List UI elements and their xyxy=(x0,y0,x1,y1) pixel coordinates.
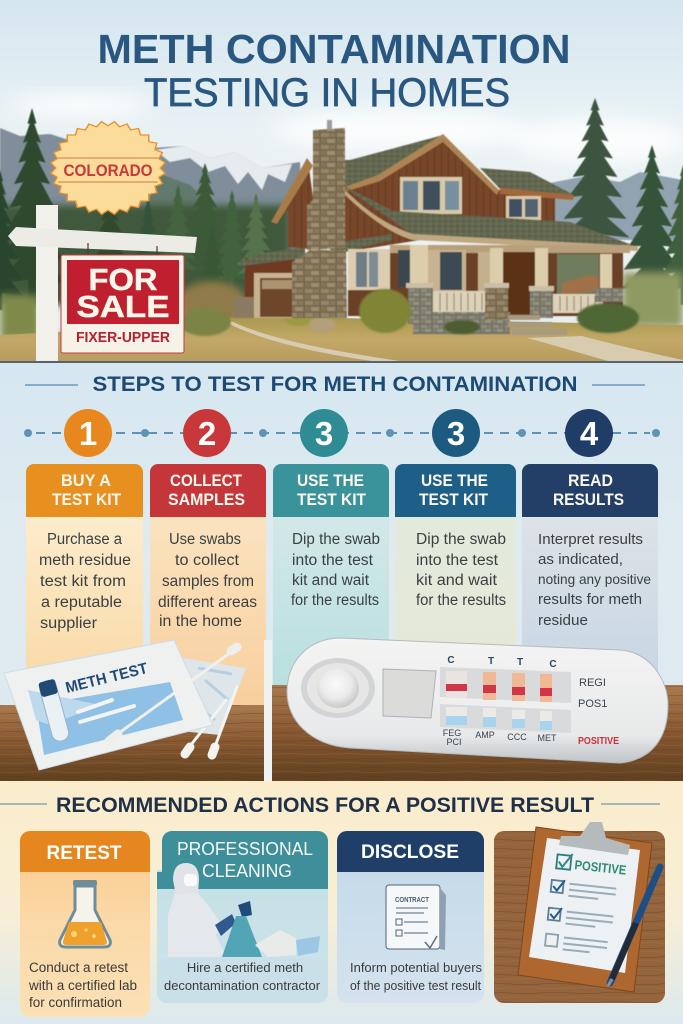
cassette labels: C xyxy=(549,659,557,670)
card: collect samples: samples from xyxy=(162,573,254,590)
card: buy a test kit: meth residue xyxy=(39,552,131,569)
right pines xyxy=(560,98,683,305)
card: use the test kit: TEST KIT xyxy=(297,491,366,509)
sign post xyxy=(36,205,58,362)
packet front xyxy=(4,640,213,770)
porch wall xyxy=(348,250,623,316)
garage xyxy=(233,247,305,318)
sky xyxy=(0,0,683,362)
dirt path xyxy=(229,321,683,362)
steps heading: STEPS TO TEST FOR METH CONTAMINATION xyxy=(92,373,578,396)
photo: test cassette: POS1 xyxy=(578,698,607,710)
card: collect samples: COLLECT xyxy=(170,472,242,490)
door xyxy=(503,252,535,314)
right wing wall xyxy=(480,190,555,226)
upper roof xyxy=(337,135,443,188)
timeline xyxy=(24,409,660,457)
mountains xyxy=(0,128,683,260)
card: read results: Interpret results xyxy=(538,531,643,548)
photo: test cassette: PCI xyxy=(446,737,462,747)
card: buy a test kit: test kit from xyxy=(40,573,126,590)
steps xyxy=(508,315,567,335)
photo: test packet xyxy=(0,640,272,781)
left forest xyxy=(0,108,290,310)
left gable xyxy=(271,158,320,250)
card: use the test kit xyxy=(273,464,389,687)
icon: flask xyxy=(60,880,110,947)
photo: test cassette: AMP xyxy=(475,730,495,740)
card: buy a test kit: supplier xyxy=(40,615,97,632)
card: use the test kit: USE THE xyxy=(297,472,364,490)
porch windows xyxy=(398,250,490,292)
sign board: FIXER-UPPER xyxy=(76,329,170,346)
card: professional cleaning xyxy=(157,831,328,1003)
house xyxy=(233,120,638,335)
cassette well xyxy=(301,658,375,718)
packet behind xyxy=(170,658,246,735)
card: disclose: Inform potential buyers xyxy=(350,960,482,975)
title xyxy=(98,26,570,115)
photo: test cassette: REGI xyxy=(579,677,606,689)
test strips xyxy=(440,667,571,733)
sign board: SALE xyxy=(76,289,170,324)
card: collect samples: Use swabs xyxy=(169,531,241,548)
card: collect samples xyxy=(150,464,266,707)
actions heading: RECOMMENDED ACTIONS FOR A POSITIVE RESULT xyxy=(56,794,594,817)
card: disclose: DISCLOSE xyxy=(361,842,459,863)
step number 2 xyxy=(183,409,231,457)
card: use the test kit second: USE THE xyxy=(421,472,488,490)
porch beam xyxy=(390,245,630,253)
sale sign xyxy=(8,205,197,362)
icon: contract: CONTRACT xyxy=(395,897,430,904)
card: use the test kit second xyxy=(395,464,516,687)
sign arm xyxy=(8,227,197,253)
card: buy a test kit: TEST KIT xyxy=(52,491,121,509)
stone foundation xyxy=(406,283,623,334)
card: use the test kit: into the test xyxy=(292,552,374,569)
card: retest: Conduct a retest xyxy=(29,960,128,975)
right roof xyxy=(480,168,574,195)
photo: test cassette: CCC xyxy=(507,732,527,742)
card: professional cleaning: Hire a certified meth xyxy=(187,960,303,975)
photo: test cassette: MET xyxy=(538,733,557,743)
card: retest: with a certified lab xyxy=(28,978,137,993)
card: retest: RETEST xyxy=(47,843,122,864)
view through porch xyxy=(557,254,599,296)
swab on top xyxy=(112,650,234,738)
cassette labels: C xyxy=(447,655,455,666)
clipboard paper xyxy=(529,838,640,973)
right window xyxy=(506,196,541,220)
card: read results xyxy=(522,464,658,687)
card: read results: RESULTS xyxy=(553,491,624,509)
vial xyxy=(38,679,70,743)
card: read results: residue xyxy=(538,612,588,629)
lower wall xyxy=(345,190,412,250)
recommended actions panel xyxy=(0,781,683,1024)
card: buy a test kit xyxy=(26,464,143,707)
card: buy a test kit: BUY A xyxy=(61,472,111,490)
checklist: POSITIVE xyxy=(574,857,627,878)
card: disclose xyxy=(337,831,484,1003)
sign board xyxy=(61,255,184,353)
icon: cleaner in protective suit xyxy=(168,863,320,957)
card: read results: results for meth xyxy=(538,591,642,608)
card: disclose: of the positive test result xyxy=(350,978,481,993)
card: collect samples: to collect xyxy=(175,552,240,569)
colorado badge: COLORADO xyxy=(64,161,152,180)
gable trim xyxy=(345,134,499,195)
step number 3: 3 xyxy=(315,415,333,452)
title: METH CONTAMINATION xyxy=(98,26,570,72)
card: read results: as indicated, xyxy=(538,551,623,568)
brush xyxy=(0,272,683,359)
step number 4 xyxy=(565,409,613,457)
step number 3 second: 3 xyxy=(447,415,465,452)
step number 4: 4 xyxy=(580,415,599,452)
cassette labels: T xyxy=(488,656,494,667)
bushes xyxy=(359,289,639,334)
card: buy a test kit: Purchase a xyxy=(47,531,122,548)
step number 3 xyxy=(300,409,348,457)
photo: test cassette xyxy=(272,638,683,781)
chimney xyxy=(292,120,347,318)
checklist xyxy=(545,852,628,955)
card: use the test kit: for the results xyxy=(291,592,379,609)
packet label: METH TEST xyxy=(64,660,150,697)
card: use the test kit second: into the test xyxy=(416,552,499,569)
fascia xyxy=(336,182,638,251)
swabs xyxy=(185,687,237,755)
card: retest: for confirmation xyxy=(29,995,122,1010)
icon: contract xyxy=(386,885,446,950)
card: use the test kit second: Dip the swab xyxy=(416,531,506,548)
step number 2: 2 xyxy=(198,415,216,452)
colorado badge xyxy=(52,122,164,214)
card: retest xyxy=(20,831,150,1017)
card: use the test kit: kit and wait xyxy=(292,572,370,589)
sign board: FOR xyxy=(88,262,158,297)
hero scene xyxy=(0,0,683,362)
lower left window xyxy=(348,249,390,290)
card: collect samples: different areas xyxy=(158,594,257,611)
card: professional cleaning: CLEANING xyxy=(202,861,292,881)
step number 1: 1 xyxy=(79,415,97,452)
porch columns xyxy=(410,245,612,288)
title: TESTING IN HOMES xyxy=(144,71,510,115)
photo: test cassette: POSITIVE xyxy=(578,736,619,747)
card: use the test kit: Dip the swab xyxy=(292,531,380,548)
clipboard board xyxy=(518,827,652,992)
main lower roof xyxy=(337,182,638,247)
cassette labels: T xyxy=(517,657,523,668)
card: professional cleaning: decontamination contractor xyxy=(164,978,321,993)
railings xyxy=(433,291,603,313)
card: read results: READ xyxy=(568,472,613,490)
card: collect samples: in the home xyxy=(159,613,242,630)
sample window xyxy=(383,669,436,718)
cassette body xyxy=(287,638,668,763)
photo: test cassette: FEG xyxy=(443,728,461,738)
steps panel xyxy=(0,361,683,781)
porch roof xyxy=(330,234,392,254)
card: read results: noting any positive xyxy=(538,571,651,587)
clouds xyxy=(10,93,683,162)
step number 3 second xyxy=(432,409,480,457)
shrub xyxy=(179,304,335,336)
step number 1 xyxy=(64,409,112,457)
ground xyxy=(0,316,683,362)
card: buy a test kit: a reputable xyxy=(41,594,122,611)
card: professional cleaning: PROFESSIONAL xyxy=(177,839,313,859)
actions background xyxy=(0,781,683,1024)
steps background xyxy=(0,362,683,781)
cassette labels xyxy=(447,655,557,670)
card: use the test kit second: for the results xyxy=(416,592,506,609)
pen xyxy=(608,867,660,986)
photo: clipboard xyxy=(494,822,665,1003)
card: use the test kit second: TEST KIT xyxy=(419,491,488,509)
main wall xyxy=(345,140,500,252)
clipboard clip xyxy=(559,822,630,855)
card: use the test kit second: kit and wait xyxy=(416,572,498,589)
card: collect samples: SAMPLES xyxy=(168,491,245,509)
upper window xyxy=(400,177,462,214)
